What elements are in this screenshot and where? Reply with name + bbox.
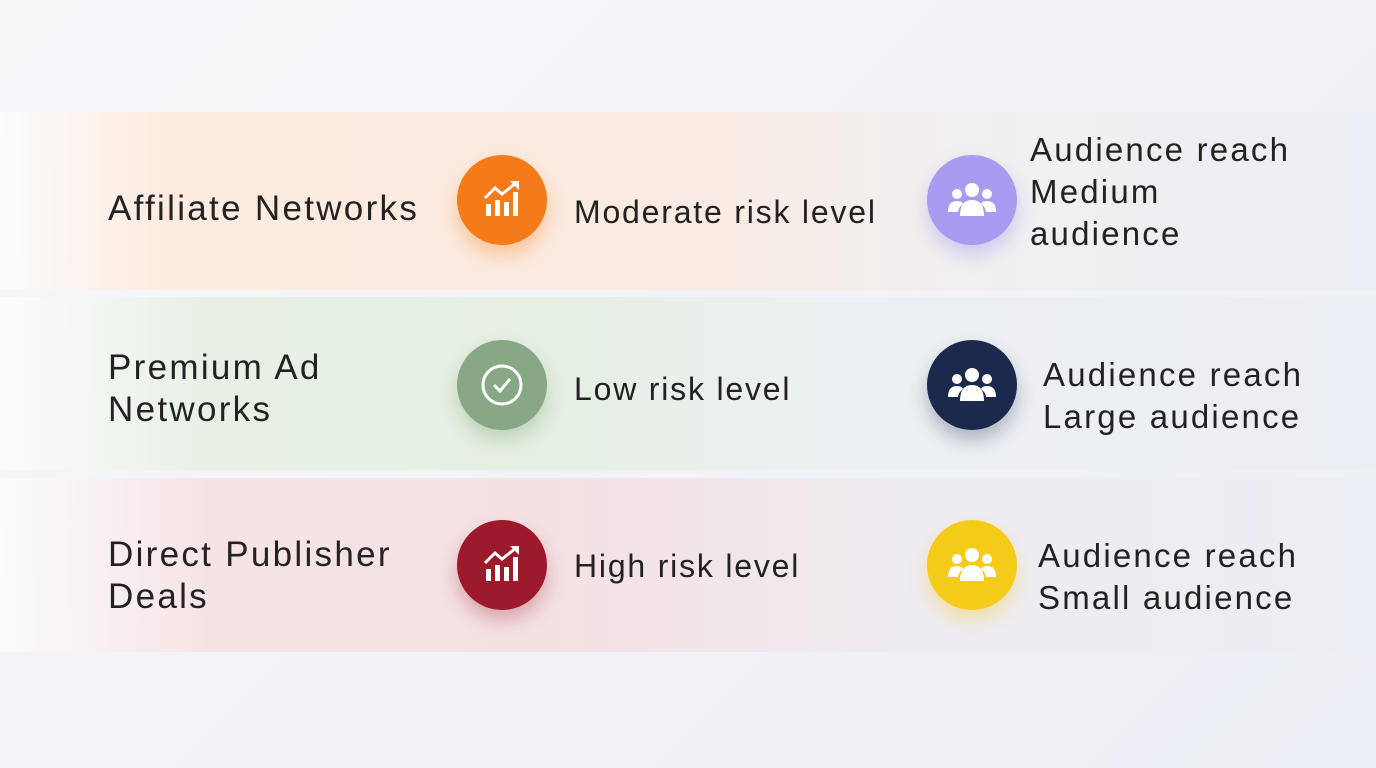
text: medium audience: Audience reach bbox=[1030, 131, 1290, 168]
heading: premium ad networks: Networks bbox=[108, 390, 272, 429]
text: large audience: Audience reach bbox=[1043, 356, 1303, 393]
icon: crimson chart bbox=[457, 520, 547, 610]
text: large audience bbox=[1043, 356, 1303, 435]
heading: premium ad networks: Premium Ad bbox=[108, 348, 322, 387]
text: small audience: Audience reach bbox=[1038, 537, 1298, 574]
icon: navy people bbox=[927, 340, 1017, 430]
heading: direct publisher deals: Direct Publisher bbox=[108, 535, 392, 574]
icon: orange chart bbox=[457, 155, 547, 245]
text: medium audience: Medium bbox=[1030, 173, 1161, 210]
heading: direct publisher deals bbox=[108, 535, 392, 616]
panel: premium ad networks row bbox=[0, 297, 1376, 470]
heading: direct publisher deals: Deals bbox=[108, 577, 209, 616]
panel: affiliate networks row bbox=[0, 112, 1376, 290]
panel: direct publisher deals row bbox=[0, 478, 1376, 652]
text: small audience bbox=[1038, 537, 1298, 616]
text: medium audience: audience bbox=[1030, 215, 1182, 252]
text: moderate risk: Moderate risk level bbox=[574, 194, 877, 230]
icon: green check bbox=[457, 340, 547, 430]
heading: premium ad networks bbox=[108, 348, 322, 429]
text: large audience: Large audience bbox=[1043, 398, 1301, 435]
text: small audience: Small audience bbox=[1038, 579, 1294, 616]
heading: affiliate networks: Affiliate Networks bbox=[108, 189, 419, 228]
icon: yellow people bbox=[927, 520, 1017, 610]
text: high risk: High risk level bbox=[574, 548, 800, 584]
text: medium audience bbox=[1030, 131, 1290, 252]
icon: purple people bbox=[927, 155, 1017, 245]
text: low risk: Low risk level bbox=[574, 371, 791, 407]
